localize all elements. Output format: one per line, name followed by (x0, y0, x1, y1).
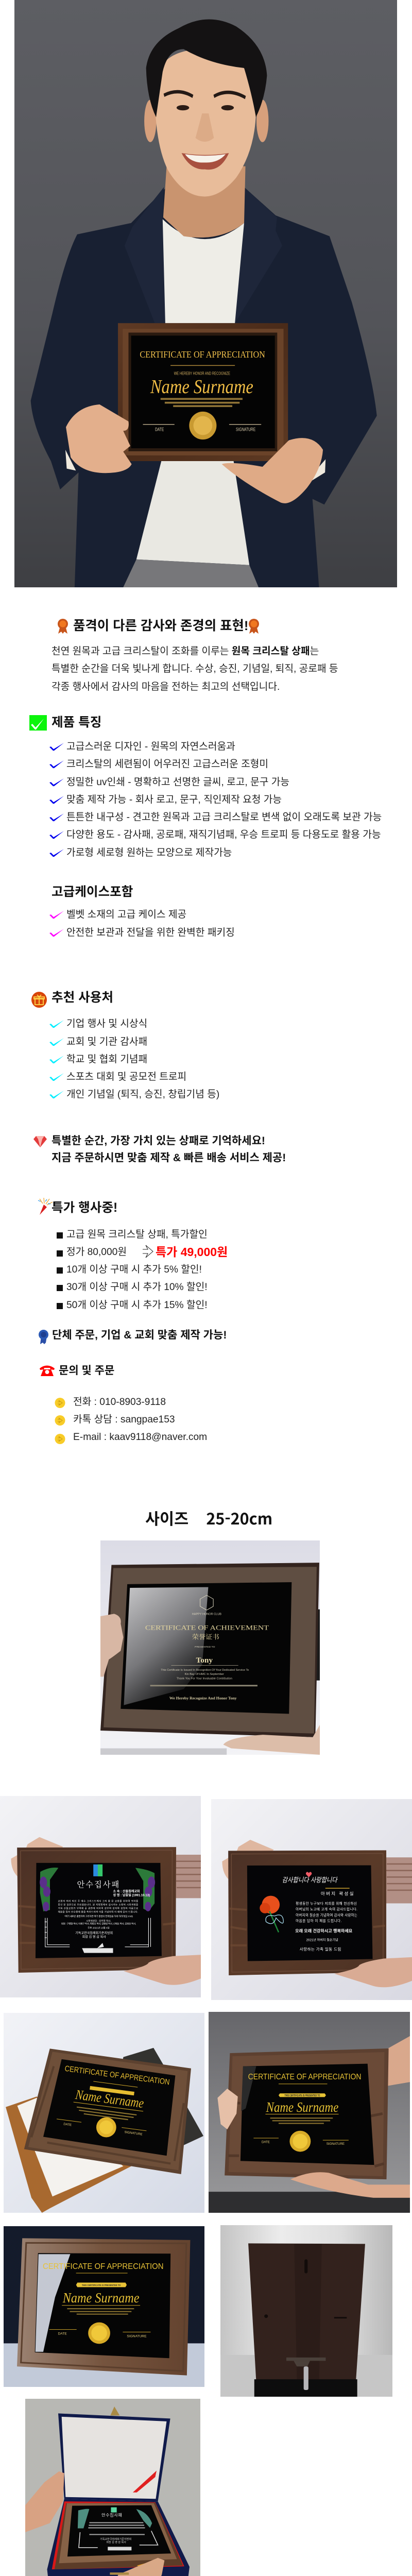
sale list: 50개 이상 구매 시 추가 15% 할인! (66, 1300, 208, 1311)
main title with rosette icons (58, 619, 259, 634)
heading: recommended uses: 추천 사용처 (52, 991, 113, 1005)
hero photo: man holding certificate plaque: WE HEREBY HONOR AND RECOGNIZE (174, 372, 230, 376)
photo: plaque held, certificate of achievement: This Certificate Is Issued In Recognition Of Your Dedicated Service To (161, 1669, 249, 1672)
photo: velvet presentation case with plaque: 안수집사패 (101, 2513, 122, 2518)
photo: velvet presentation case with plaque (25, 2399, 200, 2576)
photo: plaque on dark backdrop with reflection: SIGNATURE (127, 2335, 147, 2338)
photo: plaque on dark backdrop with reflection: THIS CERTIFICATE IS PRESENTED TO (82, 2284, 121, 2287)
icon: party popper (38, 1198, 53, 1215)
photo: church plaque held by hands: 기독교한국침례회기준지방회 (75, 1931, 113, 1935)
photo: plaque held, certificate of achievement: 荣誉证书 (192, 1632, 219, 1641)
photo: thank-you plaque with carnation: 마음을 담아 이 패를 드립니다. (296, 1919, 342, 1923)
feature checklist: 가로형 세로형 원하는 모양으로 제작가능 (66, 848, 232, 858)
icon: blue ribbon (39, 1330, 48, 1344)
intro paragraph: 특별한 순간을 더욱 빛나게 합니다. 수상, 승진, 기념일, 퇴직, 공로패 등 (52, 664, 338, 674)
photo: thank-you plaque with carnation: 감사합니다 사랑합니다 (282, 1876, 338, 1884)
feature checklist: 정밀한 uv인쇄 - 명확하고 선명한 글씨, 로고, 문구 가능 (66, 777, 289, 788)
photo: plaque held, certificate of achievement: PRESENTED TO (195, 1646, 215, 1649)
intro paragraph: 각종 행사에서 감사의 마음을 전하는 최고의 선택입니다. (52, 682, 280, 692)
heading: premium case included: 고급케이스포함 (52, 885, 133, 899)
icon: green check box (29, 715, 47, 731)
photo: plaque held, certificate of achievement: HAPPY HONOR CLUB (192, 1613, 221, 1616)
photo: church plaque held by hands: *여기 새로운 출발하여 그리하면 여기 평생의 헌희동을 하게 하리라(딤 2:10) (64, 1914, 133, 1918)
photo: plaque on dark backdrop with reflection: CERTIFICATE OF APPRECIATION (43, 2262, 163, 2271)
photo: thank-you plaque with carnation: 평생동안 누구보다 저희를 위해 헌신하신 (296, 1901, 357, 1906)
feature checklist (49, 741, 382, 858)
case checklist: 안전한 보관과 전달을 위한 완벽한 패키징 (66, 927, 235, 938)
photo: plaque held against grey background: DATE (262, 2141, 270, 2144)
heading text: 품격이 다른 감사와 존경의 표현! (73, 619, 248, 633)
contact list (55, 1396, 207, 1444)
photo: thank-you plaque with carnation: 아버지 곽성실 (321, 1891, 354, 1896)
recommended uses checklist: 기업 행사 및 시상식 (66, 1019, 147, 1029)
intro paragraph: 천연 원목과 고급 크리스탈이 조화를 이루는 원목 크리스탈 상패는 (52, 646, 319, 657)
contact list: 카톡 상담 : sangpae153 (73, 1414, 175, 1425)
photo: plaque held against grey background: CERTIFICATE OF APPRECIATION (248, 2073, 361, 2081)
photo: plaque held, certificate of achievement (100, 1540, 320, 1755)
photo: church plaque held by hands: 채움을 입어 안수함에 몸을 축하드리며 이를 기념하여 이 패에 담아 드립니다. (58, 1910, 138, 1913)
photo: thank-you plaque with carnation: 2021년 아버지 칠순기념 (306, 1938, 338, 1942)
icon: rosette left (58, 619, 68, 634)
heading: size: 사이즈 25-20cm (145, 1506, 272, 1529)
icon: rosette right (249, 619, 259, 634)
photo: plaque held, certificate of achievement: CERTIFICATE OF ACHIEVEMENT (145, 1624, 269, 1631)
photo: thank-you plaque with carnation (211, 1799, 412, 2000)
photo: plaque held, certificate of achievement: We Hereby Recognize And Honor Tony (169, 1696, 237, 1701)
sale list (57, 1229, 228, 1311)
feature checklist: 크리스탈의 세련됨이 어우러진 고급스러운 조형미 (66, 759, 268, 770)
callout: special moments message: 특별한 순간, 가장 가치 있는 상패로 기억하세요! (52, 1135, 265, 1147)
photo: plaque held, certificate of achievement: Tony (196, 1657, 213, 1665)
arrow (143, 1245, 153, 1258)
feature checklist: 고급스러운 디자인 - 원목의 자연스러움과 (66, 741, 235, 752)
feature checklist: 다양한 용도 - 감사패, 공로패, 재직기념패, 우승 트로피 등 다용도로 활용 가능 (66, 829, 381, 840)
icon: red telephone (40, 1365, 55, 1376)
icon: gift badge (31, 992, 47, 1008)
photo: plaque held against grey background: THIS CERTIFICATE IS PRESENTED TO (284, 2094, 320, 2097)
sale list: 고급 원목 크리스탈 상패, 특가할인 (66, 1229, 208, 1240)
hero photo: man holding certificate plaque: SIGNATURE (236, 427, 256, 432)
feature checklist: 튼튼한 내구성 - 견고한 원목과 고급 크리스탈로 변색 없이 오래도록 보관 가능 (66, 812, 382, 823)
photo: church plaque held by hands: 회장 김 영 삼 목사 (82, 1935, 106, 1939)
heading: special sale: 특가 행사중! (52, 1201, 117, 1215)
photo: plaque held against grey background: SIGNATURE (327, 2142, 345, 2146)
photo: church plaque held by hands: 교회의 머리 되신 주 예수 그리스도께서 그의 몸 된 교회를 위하여 귀하를 (58, 1899, 138, 1903)
photo: plaque on notebook: Name Surname (74, 2087, 145, 2111)
photo: plaque on dark backdrop with reflection: Name Surname (62, 2290, 140, 2306)
hero photo: man holding certificate plaque: Name Surname (150, 376, 253, 398)
photo: plaque on dark backdrop with reflection (4, 2226, 204, 2387)
recommended uses checklist: 스포츠 대회 및 공모전 트로피 (66, 1072, 186, 1082)
photo: church plaque held by hands: 주후 2021년 10월 4일 (88, 1926, 110, 1930)
photo: plaque on notebook (4, 2013, 204, 2213)
photo: church plaque held by hands: 안수집사패 (77, 1878, 119, 1890)
heading: contact: 문의 및 주문 (59, 1365, 114, 1377)
recommended uses checklist: 학교 및 협회 기념패 (66, 1054, 147, 1065)
recommended uses checklist: 개인 기념일 (퇴직, 승진, 창립기념 등) (66, 1089, 219, 1100)
case checklist: 벨벳 소재의 고급 케이스 제공 (66, 909, 186, 920)
intro paragraph (52, 646, 338, 692)
recommended uses checklist: 교회 및 기관 감사패 (66, 1037, 147, 1047)
sale list: 정가 80,000원 (66, 1247, 127, 1258)
photo: church plaque held by hands: 거쳐 산돌교회가 부여해 준 권한에 의하여 성부와 성자와 성령의 이름으로 (58, 1906, 138, 1910)
photo: plaque on notebook: DATE (63, 2122, 72, 2127)
photo: church plaque held by hands: 성 명 : 남중일 (1991.10.13) (113, 1893, 150, 1897)
heading: group orders: 단체 주문, 기업 & 교회 맞춤 제작 가능! (52, 1329, 227, 1341)
sale list: 30개 이상 구매 시 추가 10% 할인! (66, 1282, 208, 1293)
contact list: 전화 : 010-8903-9118 (73, 1397, 166, 1408)
photo: thank-you plaque with carnation: 오래 오래 건강하시고 행복하세요 (295, 1928, 353, 1933)
photo: plaque held against grey background (209, 2012, 410, 2213)
photo: velvet presentation case with plaque: 기독교한국침례회기준지방회 (100, 2537, 131, 2541)
photo: church plaque held by hands: 소 속 : 산돌침례교회 (113, 1889, 140, 1893)
photo: church plaque held by hands: 종신 된 일꾼으로 부르셨습니다. 본 지방회에서 실시하는 소정의 시취과정을 (58, 1903, 138, 1907)
photo: church plaque held by hands (0, 1796, 201, 1997)
case checklist (49, 909, 235, 938)
photo: plaque held, certificate of achievement: Thank You For Your Invaluable Contribution (177, 1677, 232, 1680)
feature checklist: 맞춤 제작 가능 - 회사 로고, 문구, 직인제작 요청 가능 (66, 794, 282, 805)
photo: thank-you plaque with carnation: 아버지의 칠순을 기념하여 감사와 사랑하는 (296, 1912, 357, 1917)
photo: thank-you plaque with carnation: 사랑하는 가족 일동 드림 (300, 1946, 341, 1952)
photo: plaque held, certificate of achievement: Kin Bay Of HMC In September (185, 1673, 224, 1676)
recommended uses checklist (49, 1018, 219, 1100)
icon: red diamond (33, 1136, 47, 1147)
photo: velvet presentation case with plaque: 회장 김 영 삼 목사 (106, 2540, 126, 2544)
hero photo: man holding certificate plaque: DATE (155, 427, 164, 432)
contact list: E-mail : kaav9118@naver.com (73, 1432, 207, 1443)
callout: special moments message: 지금 주문하시면 맞춤 제작 & 빠른 배송 서비스 제공! (52, 1152, 286, 1164)
sale list: 10개 이상 구매 시 추가 5% 할인! (66, 1264, 202, 1275)
hero photo: man holding certificate plaque (14, 0, 397, 587)
photo: plaque on notebook: SIGNATURE (124, 2130, 143, 2137)
photo: church plaque held by hands: 위원 : 구행열 목사, 이재구 목사, 여정호 목사, 김명성 목사, 신재호 목사, 김정승 목사, (61, 1922, 136, 1925)
photo: church plaque held by hands: 시취위원장 : 김주열 목사, (86, 1919, 111, 1923)
photo: back of plaque with stand (220, 2225, 392, 2397)
photo: plaque on notebook: CERTIFICATE OF APPRECIATION (64, 2064, 170, 2087)
photo: plaque on dark backdrop with reflection: DATE (58, 2332, 67, 2335)
photo: plaque held against grey background: Name Surname (266, 2099, 338, 2115)
photo: thank-you plaque with carnation: 아버님의 노고에 고개 숙여 감사드립니다. (296, 1907, 357, 1911)
heading: product features: 제품 특징 (52, 716, 101, 730)
callout: special moments message (52, 1135, 286, 1164)
hero photo: man holding certificate plaque: CERTIFICATE OF APPRECIATION (140, 350, 265, 360)
sale price: 특가 49,000원 (156, 1245, 228, 1259)
